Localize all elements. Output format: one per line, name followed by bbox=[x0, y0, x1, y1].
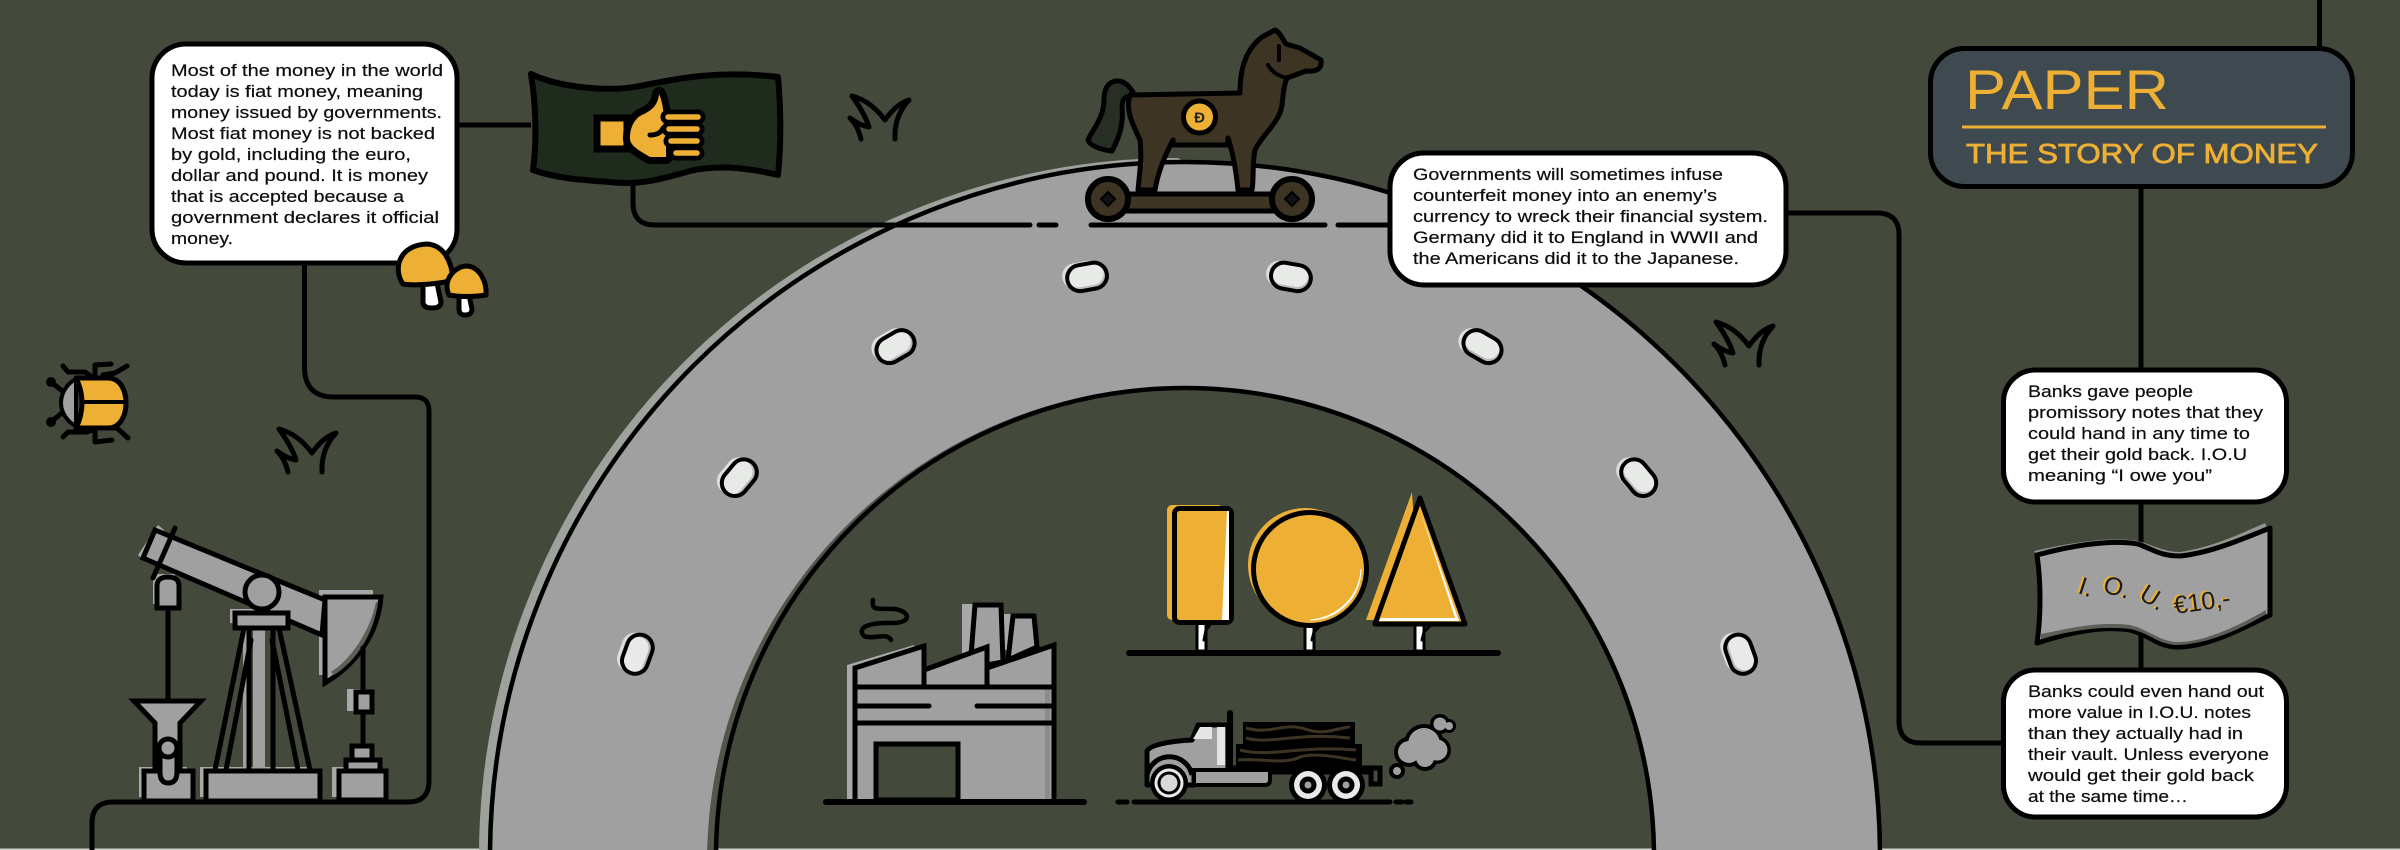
callout: more value in notes: their vault. Unless everyone bbox=[2028, 745, 2269, 764]
callout: promissory notes: Banks gave people bbox=[2028, 382, 2193, 401]
callout: fiat money: Most fiat money is not backed bbox=[171, 124, 435, 143]
callout: counterfeit money bbox=[1390, 153, 1786, 285]
icon: trees bbox=[1129, 492, 1498, 653]
callout: fiat money: dollar and pound. It is money bbox=[171, 166, 429, 185]
icon: oil pump jack bbox=[134, 525, 386, 801]
icon: I.O.U. note: O. bbox=[2100, 571, 2133, 605]
title panel bbox=[1930, 48, 2352, 186]
callout: more value in notes: more value in I.O.U. notes bbox=[2028, 703, 2251, 722]
icon: trojan horse bbox=[1088, 30, 1321, 219]
callout: counterfeit money: currency to wreck their financial system. bbox=[1413, 207, 1768, 226]
callout: counterfeit money: Germany did it to England in WWII and bbox=[1413, 228, 1758, 247]
callout: fiat money: government declares it official bbox=[171, 208, 439, 227]
callout: more value in notes: would get their gold back bbox=[2027, 766, 2255, 785]
callout: fiat money: today is fiat money, meaning bbox=[171, 82, 423, 101]
icon: I.O.U. note: O. bbox=[2098, 570, 2131, 604]
icon: mushrooms bbox=[398, 244, 486, 315]
title panel: PAPER bbox=[1965, 58, 2169, 121]
icon: I.O.U. note: €10,- bbox=[2170, 583, 2230, 619]
callout: fiat money: money. bbox=[171, 229, 233, 248]
icon: beetle bbox=[46, 364, 128, 442]
road markers bbox=[613, 259, 1760, 677]
curved road bbox=[479, 158, 1880, 850]
icon: I.O.U. note: U. bbox=[2135, 579, 2171, 616]
grass tufts bbox=[277, 96, 1773, 472]
icon: I.O.U. note: U. bbox=[2133, 578, 2169, 615]
callout: counterfeit money: Governments will sometimes infuse bbox=[1413, 165, 1723, 184]
callout: more value in notes: at the same time… bbox=[2028, 787, 2188, 806]
callout: more value in notes: than they actually had in bbox=[2028, 724, 2243, 743]
callout: promissory notes: promissory notes that they bbox=[2028, 403, 2264, 422]
icon: I.O.U. note: I. bbox=[2073, 571, 2095, 602]
icon: I.O.U. note bbox=[2034, 523, 2270, 647]
callout: counterfeit money: counterfeit money into an enemy’s bbox=[1413, 186, 1717, 205]
icon: exhaust smoke bbox=[1391, 714, 1456, 777]
callout: fiat money: Most of the money in the world bbox=[171, 61, 443, 80]
callout: promissory notes: get their gold back. I.O.U bbox=[2028, 445, 2247, 464]
title panel: THE STORY OF MONEY bbox=[1966, 138, 2318, 169]
callout: promissory notes: meaning “I owe you” bbox=[2028, 466, 2212, 485]
callout: more value in notes bbox=[2004, 670, 2286, 817]
icon: banknote with thumbs up bbox=[531, 74, 780, 183]
callout: fiat money: money issued by governments. bbox=[171, 103, 442, 122]
callout: promissory notes: could hand in any time to bbox=[2028, 424, 2250, 443]
icon: logging truck bbox=[1118, 713, 1411, 804]
icon: trojan horse: Ð bbox=[1194, 110, 1205, 126]
callout: fiat money: that is accepted because a bbox=[171, 187, 405, 206]
callout: more value in notes: Banks could even hand out bbox=[2028, 682, 2264, 701]
callout: fiat money bbox=[152, 44, 457, 263]
callout: counterfeit money: the Americans did it to the Japanese. bbox=[1413, 249, 1739, 268]
callout: promissory notes bbox=[2004, 370, 2286, 502]
icon: I.O.U. note: I. bbox=[2075, 572, 2097, 603]
callout: fiat money: by gold, including the euro, bbox=[171, 145, 411, 164]
icon: I.O.U. note: €10,- bbox=[2172, 584, 2232, 620]
icon: factory bbox=[826, 600, 1084, 802]
